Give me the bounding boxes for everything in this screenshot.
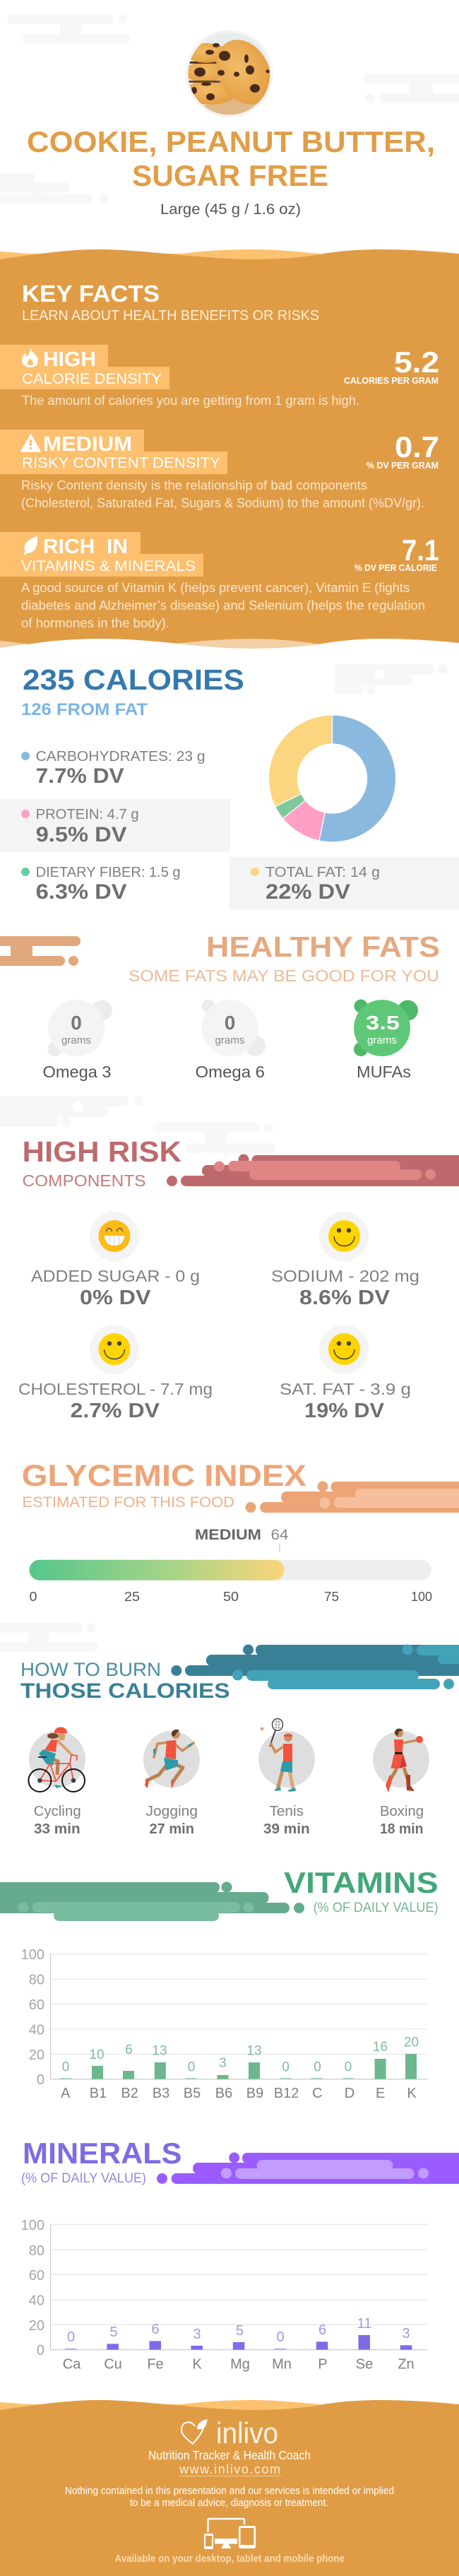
icon: boxer [386,1729,423,1792]
description: A good source of Vitamin K (helps prevent cancer), Vitamin E (fights [21,581,410,595]
component: added sugar: ADDED SUGAR - 0 g [31,1267,200,1285]
high risk subheading: COMPONENTS [23,1171,145,1190]
omega 3 [42,1000,112,1081]
gauge scale: 50 [223,1590,239,1604]
value: 0.7 [395,430,439,463]
website: www.inlivo.com [179,2462,280,2476]
panel: vitamins [0,1866,439,2101]
bar chart: vitamins: E [376,2086,385,2101]
component: saturated fat: SAT. FAT - 3.9 g [280,1380,411,1398]
bar chart: minerals: Ca [63,2357,81,2373]
bar chart: vitamins: B2 [121,2086,138,2101]
component: sodium: SODIUM - 202 mg [271,1267,419,1285]
availability note: Available on your desktop, tablet and mobile phone [114,2553,345,2565]
background cloud: above burn section [0,1623,98,1652]
background cloud [334,664,448,695]
label: RISKY CONTENT DENSITY [22,455,220,471]
legend: total fat: TOTAL FAT: 14 g [266,865,380,880]
icon: tennis player [260,1718,296,1792]
unit: % DV PER CALORIE [354,562,437,573]
component: sodium: 8.6% DV [299,1287,391,1309]
bar chart: minerals: 3 [402,2326,410,2341]
bar chart: vitamins: B6 [215,2086,232,2101]
legend: dietary fiber: 6.3% DV [36,880,127,904]
legend: carbohydrates [21,749,205,788]
glycemic heading: GLYCEMIC INDEX [22,1459,306,1493]
background cloud: top right [363,73,459,103]
icon: cyclist [28,1727,85,1792]
key facts subheading: LEARN ABOUT HEALTH BENEFITS OR RISKS [22,308,319,324]
component: added sugar [31,1212,200,1309]
decorative stripes [157,2152,459,2184]
burn heading line two: THOSE CALORIES [20,1679,230,1703]
bar chart: minerals: P [318,2357,328,2373]
bar chart: minerals: 5 [236,2323,244,2339]
vitamins heading: VITAMINS [284,1866,439,1899]
bar chart: vitamins: 16 [373,2040,388,2055]
icon: runner [145,1730,193,1789]
logo: inlivo heart and wordmark: inlivo [216,2416,278,2450]
MUFAs: grams [367,1034,397,1046]
healthy fats subheading: SOME FATS MAY BE GOOD FOR YOU [129,967,439,985]
bar chart: vitamins: D [345,2086,354,2101]
value: 5.2 [394,345,439,379]
bar chart: vitamins: 6 [125,2043,133,2057]
high risk heading: HIGH RISK [23,1135,181,1168]
panel: calories [0,663,459,909]
bar chart: minerals: 20 [29,2318,44,2334]
icon: leaf [23,536,37,555]
bar chart: vitamins: 0 [314,2060,321,2075]
rating: RICH IN [43,536,128,558]
bar chart: vitamins [21,1947,427,2101]
description: (Cholesterol, Saturated Fat, Sugars & Sodium) to the amount (%DV/gr). [21,496,424,510]
label: CALORIE DENSITY [22,371,162,387]
bar chart: vitamins: B1 [90,2086,107,2101]
bar chart: minerals: 0 [276,2329,285,2345]
vitamins subheading: (% OF DAILY VALUE) [314,1900,439,1915]
legend: protein [0,799,230,851]
description: of hormones in the body). [21,616,169,630]
activity: cycling: Cycling [34,1804,81,1819]
bar chart: minerals: 5 [109,2324,118,2340]
omega 3: grams [61,1034,91,1046]
rating: MEDIUM [43,433,132,456]
gauge label: 64 [271,1527,289,1543]
description [21,581,425,630]
bar chart: vitamins: B5 [184,2086,201,2101]
bar chart: vitamins: 20 [29,2048,44,2063]
bar chart: vitamins: 0 [282,2060,290,2075]
bar chart: vitamins: K [407,2086,417,2101]
icon: warning [21,435,40,451]
icon: smiling face [99,1333,130,1365]
background cloud: middle left [0,173,109,203]
bar chart: vitamins: 13 [152,2043,167,2059]
fact: rich in vitamins and minerals [0,532,439,630]
bar chart: minerals: Se [356,2357,373,2373]
MUFAs [354,999,418,1081]
bar chart: vitamins: B3 [153,2086,169,2101]
bar chart: minerals: Cu [104,2357,122,2373]
bar chart: vitamins: 60 [29,1997,44,2013]
food photo: cookies [185,30,273,117]
legend: dietary fiber: DIETARY FIBER: 1.5 g [36,865,181,880]
value: 7.1 [402,533,439,567]
bar chart: minerals: Fe [147,2357,164,2373]
description [21,478,424,510]
description: The amount of calories you are getting from 1 gram is high. [22,394,359,408]
rating: HIGH [43,348,96,371]
bar chart: minerals: 11 [357,2316,371,2332]
component: saturated fat: 19% DV [304,1400,385,1422]
disclaimer [65,2486,394,2509]
decorative stripes light [232,1645,459,1689]
bar chart: minerals [21,2218,427,2373]
bar chart: vitamins: 100 [21,1947,44,1963]
bar chart: vitamins: 10 [89,2048,105,2062]
component: cholesterol [18,1325,213,1422]
calories heading: 235 CALORIES [23,663,244,696]
disclaimer: to be a medical advice, diagnosis or treatment. [130,2498,328,2509]
omega 6: Omega 6 [195,1063,265,1081]
minerals subheading: (% OF DAILY VALUE) [21,2170,146,2186]
decorative stripes light [214,1161,436,1180]
bar chart: minerals: 3 [193,2327,201,2342]
background cloud: top left [7,14,130,44]
bar chart: vitamins: C [312,2086,323,2101]
bar chart: minerals: Mn [272,2357,292,2373]
omega 6 [195,999,266,1081]
bar chart: vitamins: B9 [246,2086,263,2101]
gauge scale: 100 [411,1590,432,1604]
icon: grinning face [99,1220,130,1252]
panel: minerals [21,2137,459,2373]
logo: inlivo heart and wordmark [181,2416,278,2450]
panel: glycemic index [22,1459,459,1604]
burn heading line one: HOW TO BURN [20,1659,161,1680]
icon: smiling face [328,1220,360,1252]
background cloud: beside high risk [153,1123,275,1153]
bar chart: vitamins: 0 [345,2060,352,2075]
decorative stripes [171,1645,459,1676]
legend: protein: 9.5% DV [36,823,127,846]
decorative stripes [246,1481,459,1513]
serving size: Large (45 g / 1.6 oz) [160,201,301,218]
component: sodium [271,1212,419,1309]
gauge scale: 25 [124,1590,140,1604]
gauge scale: 0 [30,1590,37,1604]
bar chart: vitamins: 0 [188,2060,195,2075]
activity: jogging [143,1730,200,1837]
gauge label [195,1527,289,1552]
bar chart: vitamins: 80 [29,1973,44,1988]
activity: tennis [258,1718,315,1837]
minerals heading: MINERALS [23,2137,182,2170]
panel: footer [0,2400,459,2576]
fact: calorie density [0,345,439,408]
bar chart: minerals: Zn [398,2357,415,2373]
legend: carbohydrates: 7.7% DV [36,764,124,788]
title: SUGAR FREE [132,159,328,192]
bar chart: vitamins: 3 [219,2056,227,2071]
panel: key facts [0,249,459,649]
bar chart: vitamins: B12 [274,2086,299,2101]
bar chart: minerals: 60 [29,2268,44,2283]
bar chart: minerals: K [192,2357,202,2373]
bar chart: vitamins: 0 [37,2072,44,2088]
bar chart: minerals: 6 [151,2322,160,2337]
gauge bar [30,1560,431,1581]
bar chart: vitamins: 0 [62,2060,69,2075]
activity: tennis: Tenis [270,1804,304,1819]
gauge scale [30,1590,432,1604]
bar chart: minerals: 6 [318,2322,326,2338]
omega 6: grams [215,1034,244,1046]
background cloud: above high risk [0,1096,143,1127]
activity: boxing: 18 min [380,1821,424,1837]
title [27,125,435,192]
activity: cycling [28,1727,85,1837]
panel: high risk [18,1135,459,1422]
bar chart: vitamins: 40 [29,2022,44,2038]
description: diabetes and Alzheimer’s disease) and Selenium (helps the regulation [21,598,425,613]
disclaimer: Nothing contained in this presentation and our services is intended or implied [65,2486,394,2497]
component: cholesterol: CHOLESTEROL - 7.7 mg [18,1380,213,1398]
panel: how to burn those calories [20,1645,459,1837]
icon: smiling face [328,1333,360,1365]
glycemic subheading: ESTIMATED FOR THIS FOOD [23,1494,234,1511]
omega 6: 0 [225,1012,235,1034]
bar chart: minerals: 0 [37,2343,44,2358]
component: cholesterol: 2.7% DV [71,1400,160,1422]
legend: total fat: 22% DV [266,880,350,904]
donut chart [268,715,396,842]
unit: CALORIES PER GRAM [344,375,439,386]
activity: jogging: Jogging [145,1804,198,1819]
panel: healthy fats [0,930,440,1081]
decorative stripes [0,936,81,966]
activity: boxing: Boxing [380,1804,424,1819]
gauge label: MEDIUM [195,1527,261,1543]
legend: dietary fiber [21,865,181,904]
bar chart: minerals: Mg [230,2357,250,2373]
decorative stripes [167,1154,459,1186]
calories from fat: 126 FROM FAT [21,700,148,719]
activity: jogging: 27 min [150,1821,194,1837]
bar chart: vitamins: 13 [246,2043,262,2059]
legend: carbohydrates: CARBOHYDRATES: 23 g [36,749,205,764]
bar chart: minerals: 100 [21,2218,44,2233]
MUFAs: 3.5 [366,1012,400,1034]
fact: risky content density [0,430,439,510]
title: COOKIE, PEANUT BUTTER, [27,125,435,158]
decorative stripes light [18,1902,254,1921]
decorative stripes [0,1882,304,1913]
decorative stripes light [221,2160,429,2179]
activity: tennis: 39 min [263,1821,310,1837]
description: Risky Content density is the relationship of bad components [21,478,367,492]
MUFAs: MUFAs [357,1063,411,1081]
unit: % DV PER GRAM [366,460,439,471]
bar chart: minerals: 0 [67,2329,75,2345]
legend: protein: PROTEIN: 4.7 g [36,807,139,822]
omega 3: Omega 3 [42,1063,112,1081]
bar chart: vitamins: 20 [404,2036,419,2050]
tagline: Nutrition Tracker & Health Coach [148,2448,311,2462]
omega 3: 0 [71,1012,82,1034]
component: saturated fat [280,1325,411,1422]
component: added sugar: 0% DV [80,1287,151,1309]
gauge scale: 75 [324,1590,339,1604]
icon: flame [22,348,38,367]
bar chart: minerals: 80 [29,2243,44,2259]
bar chart: minerals: 40 [29,2293,44,2309]
legend: total fat [230,857,459,909]
healthy fats heading: HEALTHY FATS [206,930,440,963]
label: VITAMINS & MINERALS [21,558,196,574]
decorative stripes light [319,1489,459,1508]
activity: cycling: 33 min [34,1821,81,1837]
key facts heading: KEY FACTS [22,281,160,307]
icon: devices [204,2519,256,2549]
activity: boxing [373,1729,429,1837]
bar chart: vitamins: A [61,2086,71,2101]
